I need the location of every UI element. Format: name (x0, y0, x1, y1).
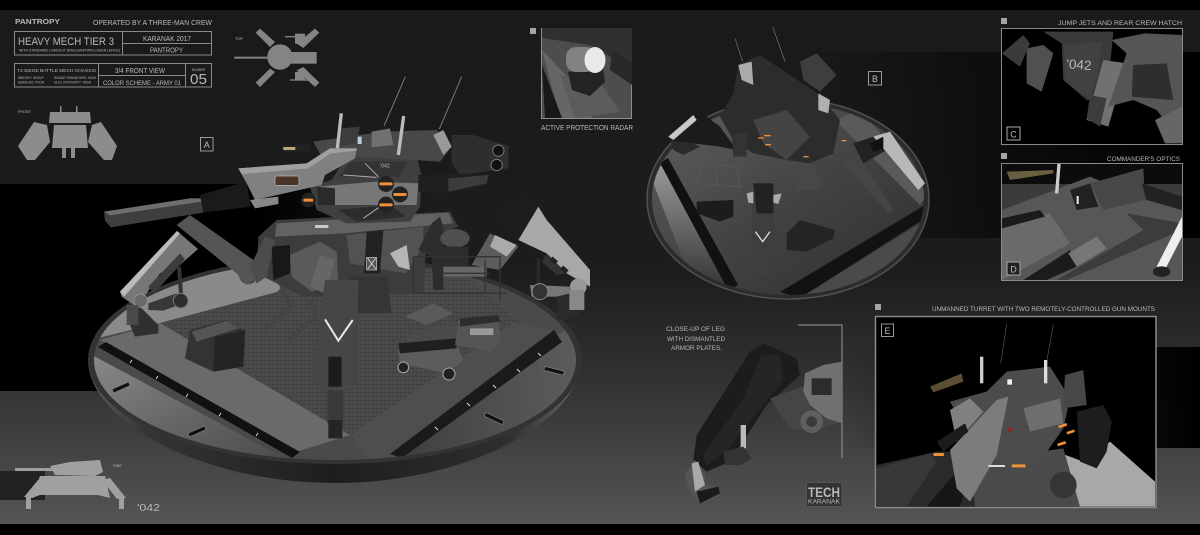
studio: PANTROPY (150, 46, 183, 54)
panel C: jump jets: C (1010, 130, 1017, 140)
subtitle: WITH STANDARD LOADOUT (RAILGUN/TWIN LASER LANCE) (19, 48, 120, 52)
turret hex (310, 157, 422, 223)
label A (200, 138, 213, 151)
main mech (104, 77, 590, 438)
platform lift and crates (693, 162, 740, 187)
author: KARANAK 2017 (143, 34, 191, 43)
crate left (185, 320, 245, 372)
color scheme: COLOR SCHEME - ARMY 01 (103, 80, 181, 87)
blueprint: top view: TOP (235, 36, 243, 41)
number: NUMBER (192, 68, 205, 72)
logo: Pantropy: PANTROPY (15, 17, 60, 26)
caption (666, 326, 725, 352)
scissor lift (398, 303, 463, 380)
specification block: 05 (190, 71, 207, 88)
chassis and turret (104, 113, 508, 313)
panel C: jump jets (1001, 18, 1182, 144)
orange lamps (301, 176, 408, 213)
caption: CLOSE-UP OF LEG (666, 326, 725, 333)
spindly mech feet (263, 282, 317, 340)
specification block (14, 64, 212, 88)
bracket (798, 325, 842, 458)
front left upper leg (177, 215, 260, 285)
coax gun (283, 144, 310, 152)
label A: A (204, 140, 210, 150)
antennas (384, 77, 462, 129)
logo: Tech Karanak: KARANAK (808, 498, 841, 506)
chassis: T3 SIEGE BATTLE MECH CHASSIS (17, 68, 96, 74)
caption: ACTIVE PROTECTION RADAR (541, 125, 633, 132)
crates right (455, 315, 501, 352)
ramp, lift and crates (312, 280, 501, 438)
stats: WEIGHT: HEAVY (18, 76, 45, 80)
logo: Tech Karanak (806, 482, 842, 506)
blueprint: front view: FRONT (18, 109, 32, 114)
panel D: commander's optics: D (1010, 264, 1017, 274)
main gun (104, 113, 404, 227)
chassis (250, 212, 458, 313)
ramp (752, 183, 775, 277)
vents (112, 366, 564, 437)
panel E: unmanned turret: E (884, 326, 891, 336)
turret hex: '042 (380, 164, 390, 170)
logo: Tech Karanak: TECH (808, 484, 840, 500)
stats: RADAR SIGNATURE: HIGH (54, 76, 97, 80)
caption: ARMOR PLATES. (671, 345, 722, 352)
caption: WITH DISMANTLED (667, 336, 725, 343)
upper deck (283, 127, 508, 193)
panel C: jump jets: JUMP JETS AND REAR CREW HATCH (1058, 20, 1182, 27)
heading: crew: OPERATED BY A THREE-MAN CREW (93, 18, 213, 27)
platform surface (94, 267, 576, 460)
panel C: jump jets: '042 (1066, 56, 1092, 73)
platform disc (80, 250, 590, 483)
panel D: commander's optics (1001, 153, 1182, 280)
rear left leg (120, 231, 317, 372)
blueprint: top view (234, 29, 319, 87)
rear right leg (472, 195, 590, 320)
stats: HANDLING: POOR (18, 80, 45, 84)
panel E: unmanned turret: UNMANNED TURRET WITH TWO REMOTELY-CONTROLLED GUN MOUNTS (932, 306, 1156, 313)
leg render (685, 343, 842, 503)
trench right (390, 330, 562, 458)
stats (18, 76, 97, 84)
label B: B (872, 74, 878, 84)
label B (868, 72, 882, 85)
blueprint: side view (15, 460, 126, 509)
title block (14, 32, 212, 55)
mast posts (337, 113, 404, 155)
front ramp leg (312, 280, 358, 438)
view: 3/4 FRONT VIEW (115, 68, 165, 75)
stats: HULL INTEGRITY: HIGH (54, 80, 92, 84)
top-down platform B (647, 27, 930, 300)
mech top view (668, 27, 925, 277)
hull number: '042 (137, 503, 161, 514)
title: HEAVY MECH TIER 3 (18, 36, 114, 48)
trench left (98, 342, 300, 458)
panel E: unmanned turret (875, 304, 1156, 508)
panel D: commander's optics: COMMANDER'S OPTICS (1107, 156, 1181, 163)
radar inset (530, 28, 633, 132)
technician and lift (413, 217, 507, 300)
blueprint: front view (18, 106, 117, 160)
leg close-up (666, 325, 842, 503)
blueprint: side view: SIDE (113, 463, 122, 468)
rear gun pods (452, 135, 508, 175)
platform rim (88, 360, 581, 483)
